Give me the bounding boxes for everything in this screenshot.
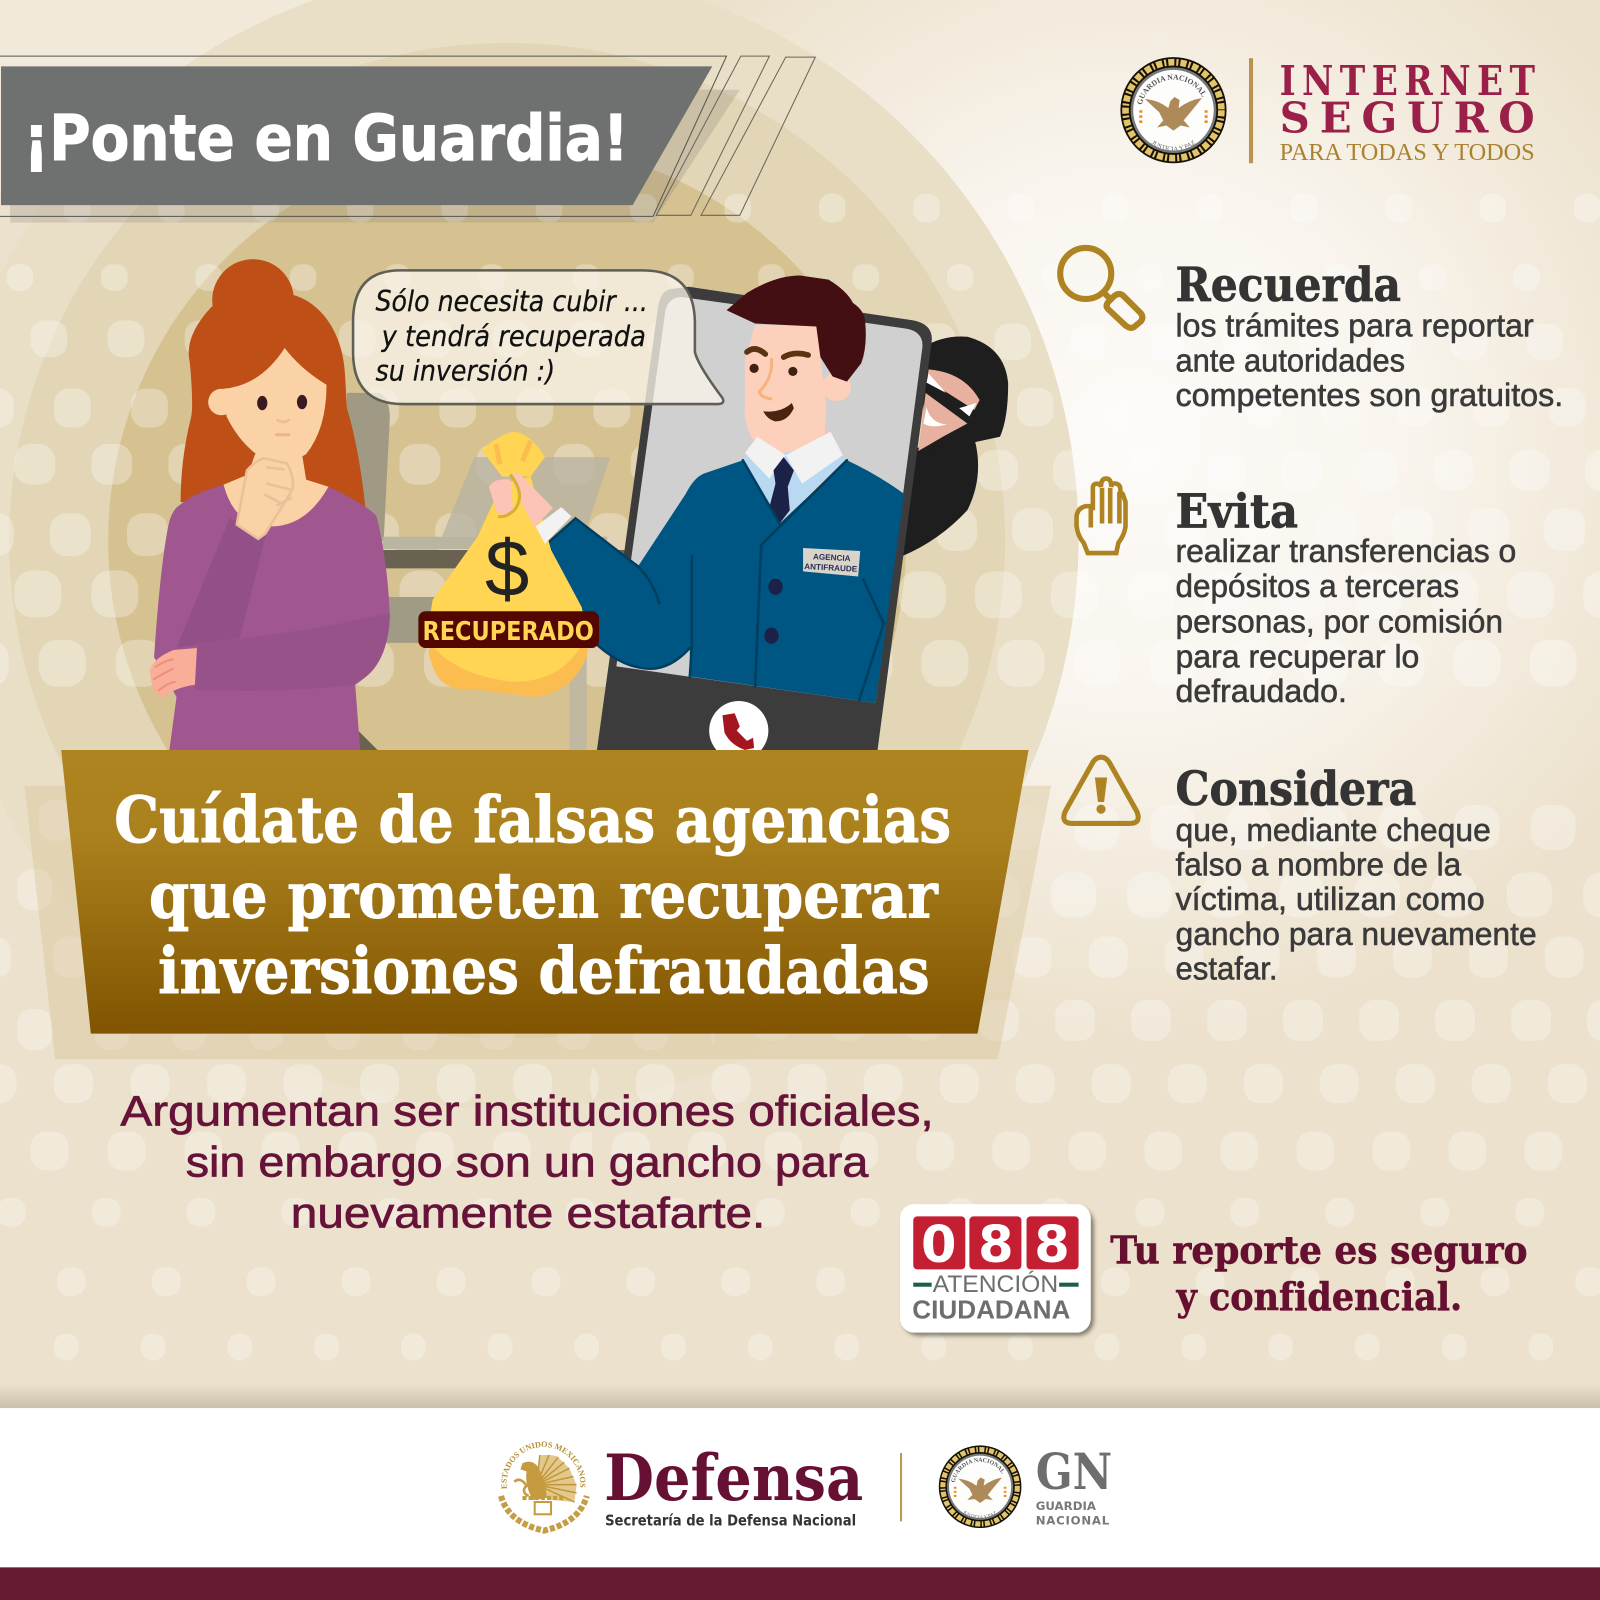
- report message: [1110, 1228, 1528, 1320]
- logo: Guardia Nacional seal: [1120, 57, 1227, 164]
- logo: national seal: [498, 1442, 590, 1534]
- section: Evita: [1176, 485, 1516, 709]
- section: Recuerda: ante autoridades: [1176, 341, 1405, 378]
- section: Evita: realizar transferencias o: [1176, 532, 1516, 569]
- section: Evita: personas, por comisión: [1176, 603, 1503, 640]
- speech bubble: su inversión :): [376, 354, 555, 388]
- lead paragraph: Argumentan ser instituciones oficiales,: [120, 1088, 934, 1136]
- 088 hotline badge: 8: [1034, 1216, 1070, 1275]
- main headline banner: inversiones defraudadas: [158, 934, 930, 1008]
- section: Recuerda: Recuerda: [1176, 258, 1401, 313]
- main headline banner: [24, 750, 1051, 1059]
- logo: small Guardia Nacional seal: [938, 1445, 1022, 1528]
- logo: Guardia Nacional seal: GUARDIA NACIONAL: [1137, 74, 1206, 104]
- name badge: ANTIFRAUDE: [804, 562, 858, 574]
- 088 hotline badge: 0: [921, 1216, 957, 1275]
- logo: GN wordmark: GN: [1036, 1442, 1112, 1501]
- report message: y confidencial.: [1176, 1275, 1462, 1320]
- main headline banner: Cuídate de falsas agencias: [114, 783, 951, 857]
- 088 hotline badge: 8: [978, 1216, 1014, 1275]
- name badge: AGENCIA: [813, 552, 851, 563]
- illustration: phone with fake agent: [547, 276, 932, 760]
- section: Recuerda: [1176, 258, 1563, 413]
- icon: raised hand: [1077, 479, 1126, 553]
- section: Considera: Considera: [1176, 762, 1416, 817]
- title text: ¡Ponte en Guardia!: [23, 101, 629, 175]
- logo: small Guardia Nacional seal: JUSTICIA Y PAZ: [962, 1510, 996, 1519]
- icon: magnifying glass: [1060, 248, 1142, 328]
- section: Evita: para recuperar lo: [1176, 637, 1419, 674]
- logo: GN wordmark: NACIONAL: [1036, 1513, 1110, 1527]
- desk and laptop scene: [347, 393, 628, 750]
- logo: GN wordmark: [1036, 1442, 1112, 1527]
- illustration: money bag: [418, 432, 599, 697]
- section: Considera: estafar.: [1176, 950, 1278, 987]
- speech bubble: Sólo necesita cubir ...: [376, 284, 648, 318]
- bottom maroon bar: [0, 1567, 1600, 1600]
- lead paragraph: nuevamente estafarte.: [291, 1190, 765, 1238]
- dollar sign: $: [485, 524, 529, 613]
- section: Evita: depósitos a terceras: [1176, 567, 1459, 604]
- logo: Internet Seguro wordmark: SEGURO: [1280, 94, 1535, 143]
- section: Considera: que, mediante cheque: [1176, 811, 1491, 848]
- 088 hotline badge: CIUDADANA: [912, 1296, 1070, 1324]
- title banner: [0, 56, 815, 222]
- logo: Defensa wordmark: Secretaría de la Defensa Nacional: [605, 1512, 856, 1530]
- footer: [0, 1408, 1600, 1534]
- recuperado tag: RECUPERADO: [422, 617, 594, 647]
- lead paragraph: sin embargo son un gancho para: [186, 1139, 869, 1187]
- phone call icon: [709, 701, 768, 760]
- section: Evita: defraudado.: [1176, 672, 1347, 709]
- logo: small Guardia Nacional seal: GUARDIA NACIONAL: [951, 1458, 1004, 1482]
- logo divider: [1249, 58, 1253, 163]
- report message: Tu reporte es seguro: [1110, 1228, 1528, 1273]
- section: Considera: gancho para nuevamente: [1176, 915, 1537, 952]
- name badge: [803, 548, 860, 577]
- logo: Guardia Nacional seal: JUSTICIA Y PAZ: [1151, 140, 1196, 151]
- section: Evita: Evita: [1176, 485, 1298, 540]
- 088 hotline badge: [900, 1204, 1094, 1336]
- main headline banner: que prometen recuperar: [149, 858, 938, 932]
- section: Considera: víctima, utilizan como: [1176, 880, 1485, 917]
- logo: Internet Seguro wordmark: [1280, 57, 1535, 166]
- icon: warning triangle: [1064, 757, 1138, 823]
- lead paragraph: [120, 1088, 934, 1238]
- speech bubble: y tendrá recuperada: [381, 319, 646, 353]
- section: Considera: [1176, 762, 1537, 987]
- logo: GN wordmark: GUARDIA: [1036, 1499, 1097, 1513]
- section: Considera: falso a nombre de la: [1176, 846, 1462, 883]
- 088 hotline badge: ATENCIÓN: [933, 1271, 1058, 1298]
- logo: Internet Seguro wordmark: PARA TODAS Y TODOS: [1280, 140, 1535, 166]
- illustration: woman thinking: [150, 259, 390, 750]
- logo: Internet Seguro wordmark: INTERNET: [1280, 57, 1535, 105]
- section: Recuerda: los trámites para reportar: [1176, 307, 1534, 344]
- logo: Defensa wordmark: Defensa: [604, 1441, 863, 1515]
- speech bubble: [353, 270, 723, 404]
- logo: national seal: ESTADOS UNIDOS MEXICANOS: [501, 1442, 586, 1490]
- section: Recuerda: competentes son gratuitos.: [1176, 376, 1563, 413]
- illustration: hooded thief behind phone: [902, 336, 1008, 556]
